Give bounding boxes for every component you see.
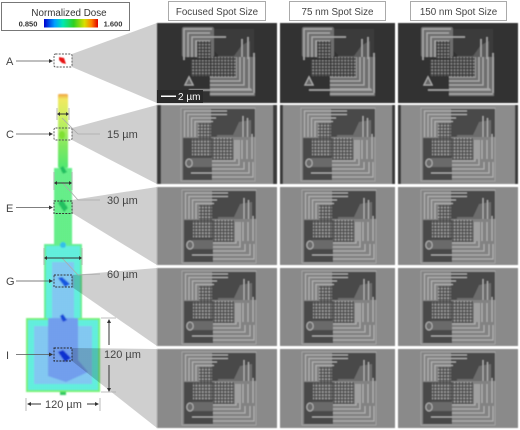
panel row E: SEM images <box>157 187 518 265</box>
legend: normalized dose colour bar: 1.600 <box>104 20 122 28</box>
region letters with arrows <box>6 56 53 362</box>
panel row A: dark SEM images <box>157 23 518 103</box>
panel row I: SEM images <box>157 349 518 428</box>
scale bar: 2 µm <box>157 90 203 103</box>
marker C <box>54 128 72 140</box>
legend: normalized dose colour bar: 0.850 <box>19 20 37 28</box>
header: 150 nm Spot Size: 150 nm Spot Size <box>420 7 498 18</box>
header: 75 nm Spot Size <box>290 2 386 20</box>
header: Focused Spot Size: Focused Spot Size <box>176 7 259 18</box>
marker E <box>54 201 72 214</box>
scale bar: 2 µm: 2 µm <box>178 92 200 103</box>
region letters with arrows: G <box>6 276 15 288</box>
width dimension callouts <box>26 108 141 411</box>
marker A: dashed region with red dose spot <box>54 54 72 67</box>
legend: normalized dose colour bar <box>2 2 130 30</box>
column headers <box>168 2 506 20</box>
header: Focused Spot Size <box>168 2 266 20</box>
projection wedges from markers to panels <box>72 23 157 428</box>
header: 75 nm Spot Size: 75 nm Spot Size <box>302 7 374 18</box>
legend: normalized dose colour bar: Normalized Dose <box>31 8 107 19</box>
region letters with arrows: E <box>6 203 13 215</box>
dose simulation shape: stepped conductor with heat map <box>26 94 100 395</box>
width dimension callouts: 30 µm <box>107 195 138 207</box>
marker G <box>54 275 72 287</box>
header: 150 nm Spot Size <box>410 2 506 20</box>
marker I <box>54 348 72 361</box>
region letters with arrows: I <box>6 350 9 362</box>
panel row G: SEM images <box>157 268 518 346</box>
width dimension callouts: 60 µm <box>107 269 138 281</box>
panel row C: SEM images <box>157 105 518 184</box>
region letters with arrows: A <box>6 56 14 68</box>
width dimension callouts: 120 µm <box>45 399 82 411</box>
region letters with arrows: C <box>6 129 14 141</box>
width dimension callouts: 15 µm <box>107 129 138 141</box>
width dimension callouts: 120 µm <box>104 349 141 361</box>
